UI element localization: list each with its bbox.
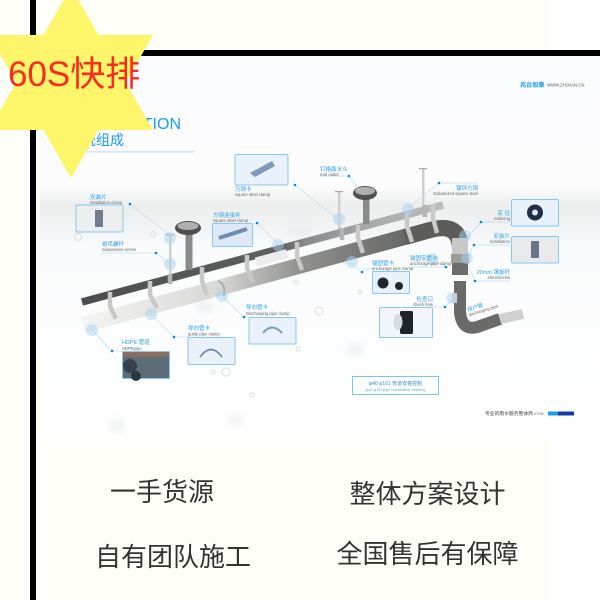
callout: check hole bbox=[380, 295, 434, 338]
callout: installation: 安装片 bbox=[493, 232, 510, 240]
label: roof outlet: 钉格面水斗 bbox=[320, 165, 348, 173]
callout: HDPE pipe: HDPE 管道 bbox=[122, 338, 150, 346]
vertical light section bbox=[452, 238, 468, 254]
callout: square steel connector: square steel clamp bbox=[213, 218, 249, 223]
logo: 兆台股集 bbox=[520, 81, 546, 89]
callout dots bbox=[111, 175, 482, 352]
roof outlet left bbox=[175, 221, 201, 270]
suspension rods bbox=[165, 168, 427, 280]
callout: installation clamp bbox=[76, 193, 123, 232]
callout: square steel connector: 方钢连接件 bbox=[213, 211, 241, 219]
selling point: 一手货源: 一手货源 bbox=[110, 477, 214, 507]
callout: anchorage pipe clamp box: anchorage pipe clamp bbox=[372, 266, 414, 271]
panel: installation drawing bbox=[40, 56, 600, 440]
vertical dark section bbox=[452, 263, 468, 275]
logo: WWW.ZHIXIAN.CN bbox=[547, 82, 584, 88]
callout: guide pipe clamp: guide pipe clamp bbox=[188, 332, 220, 336]
callout: reducing: reducing bbox=[494, 216, 511, 221]
right page margin bbox=[550, 0, 600, 600]
callout: HDPE pipe bbox=[122, 338, 170, 381]
caption box: φ40 φ161 管道安装控制 bbox=[369, 380, 422, 387]
label: discharging pipe: discharging pipe bbox=[468, 303, 499, 317]
label: suspension screw: 悬吊螺杆 bbox=[102, 240, 125, 248]
callout: discharging pipe clamp: 导向管卡 bbox=[246, 303, 269, 311]
label: anchorage pipe clamp: anchorage pipe clamp bbox=[410, 261, 452, 266]
bend dark cover bbox=[405, 228, 460, 246]
callout: reducing bbox=[494, 200, 558, 226]
caption box: φ40 φ110pipe installation drawing bbox=[366, 387, 425, 392]
callout: square steel clamp bbox=[235, 154, 288, 197]
pipe clamps bbox=[110, 204, 437, 319]
soft background blobs bbox=[110, 227, 363, 431]
selling point: 自有团队施工: 自有团队施工 bbox=[95, 542, 251, 572]
discharging pipe outlet bbox=[500, 314, 523, 319]
callout: square steel clamp: 万钢卡 bbox=[235, 185, 252, 193]
heading: Chinese title: 系统组成 bbox=[68, 132, 124, 148]
callout: installation clamp: Installation clamp bbox=[90, 200, 123, 205]
label: galvanized square steel bbox=[433, 184, 478, 196]
callout lines bbox=[92, 176, 510, 351]
square steel connector bbox=[256, 254, 287, 262]
droplets bbox=[74, 232, 362, 397]
footer page number: 07/38 bbox=[534, 412, 544, 416]
highlight circles bbox=[86, 203, 473, 336]
callout: 20mm screw: 20mmscrew bbox=[487, 275, 511, 280]
callout: check hole: check hole bbox=[413, 302, 434, 307]
callout: 20mm screw bbox=[477, 268, 511, 280]
HDPE main pipe and bend bbox=[83, 228, 460, 325]
callout: discharging pipe clamp bbox=[246, 303, 296, 344]
label: discharging pipe: 排户管 bbox=[466, 301, 485, 314]
suspension square steel bbox=[82, 205, 443, 302]
badge text: 60S快排 bbox=[8, 55, 140, 94]
callout: anchorage pipe clamp box bbox=[372, 259, 414, 294]
callout: HDPE pipe: HDPEpipe bbox=[122, 346, 142, 351]
footer bar bbox=[548, 412, 574, 416]
label: anchorage pipe clamp bbox=[410, 254, 452, 266]
callout: square steel clamp: square steel clamp bbox=[235, 192, 271, 197]
callout: discharging pipe clamp: Discharging pipe clamp bbox=[246, 311, 290, 316]
callout: 20mm screw: 20mm 镙旋杆 bbox=[477, 268, 510, 276]
anchorage clamp band bbox=[451, 254, 469, 263]
callout: check hole: 检查口 bbox=[416, 295, 433, 303]
callout: installation clamp: 安装片 bbox=[90, 193, 107, 201]
label: discharging pipe bbox=[466, 296, 499, 317]
footer text: 专业的雨水服务整体商 bbox=[485, 410, 533, 417]
callout: installation bbox=[490, 232, 558, 263]
label: anchorage pipe clamp: 锚固安管卡 bbox=[410, 254, 438, 262]
check hole bbox=[452, 293, 457, 303]
callout: guide pipe clamp: 导向管卡 bbox=[188, 324, 211, 332]
discharging pipe bbox=[460, 281, 500, 328]
selling point: 全国售后有保障: 全国售后有保障 bbox=[336, 539, 519, 569]
callout: reducing: 变 径 bbox=[497, 209, 510, 217]
roof outlet right bbox=[353, 186, 377, 224]
callout: guide pipe clamp bbox=[188, 324, 235, 364]
selling point: 整体方案设计: 整体方案设计 bbox=[349, 479, 506, 509]
callout: anchorage pipe clamp box: 锚固管卡 bbox=[372, 259, 395, 267]
label: galvanized square steel: Galvanized square steel bbox=[433, 191, 478, 196]
pipe system bbox=[82, 168, 523, 328]
label: suspension screw bbox=[102, 240, 137, 252]
label: roof outlet: roof outlet bbox=[320, 172, 339, 177]
badge: yellow star bbox=[0, 0, 153, 178]
label: roof outlet bbox=[320, 165, 348, 177]
heading: English title: INSTALLATION bbox=[70, 116, 181, 133]
logo bbox=[520, 81, 584, 89]
caption box bbox=[352, 376, 438, 394]
callout: installation: Installation bbox=[490, 239, 511, 244]
label: galvanized square steel: 镀锌方钢 bbox=[456, 184, 478, 192]
heading underline bbox=[60, 151, 195, 152]
callout: square steel connector bbox=[212, 211, 252, 246]
label: suspension screw: Suspension screw bbox=[102, 247, 137, 252]
